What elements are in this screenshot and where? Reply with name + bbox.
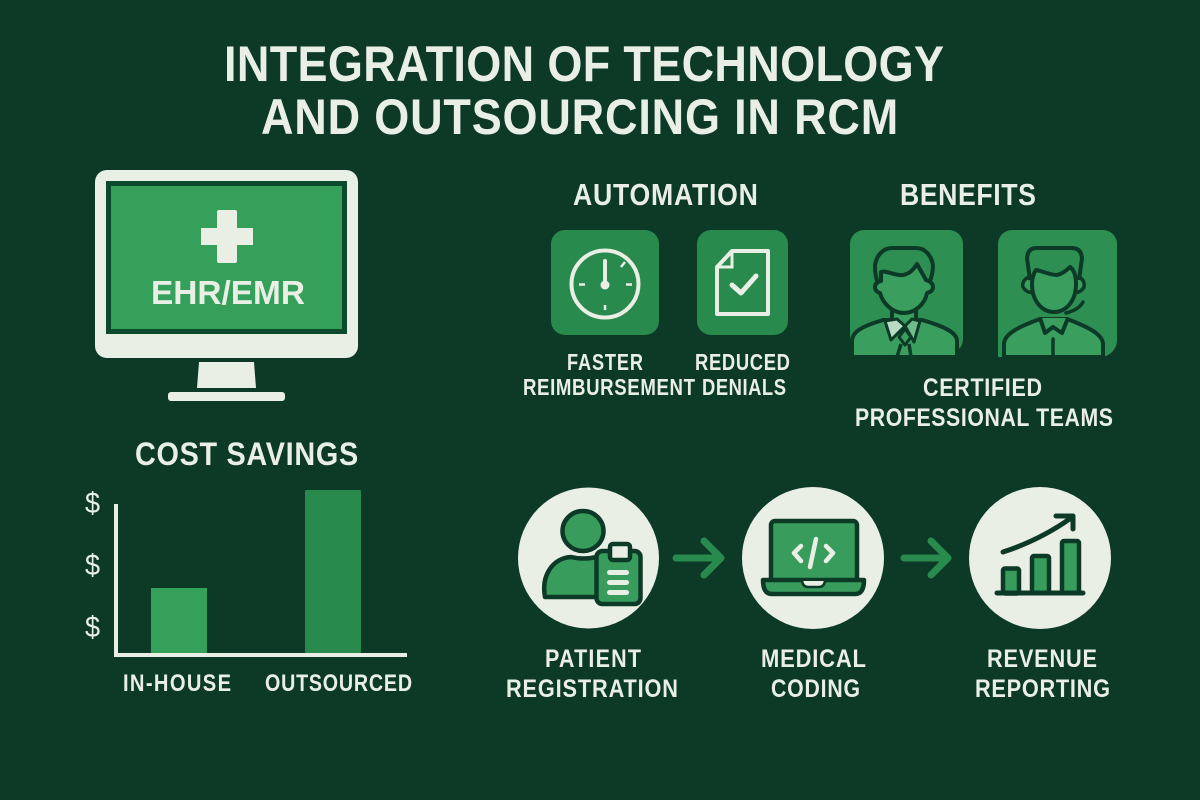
label: in-house: IN-HOUSE: [123, 669, 231, 696]
heading: automation: AUTOMATION: [573, 178, 758, 213]
icon: patient registration: [518, 488, 659, 628]
icon: professional with tie: [850, 230, 963, 357]
icon: document check card: [697, 230, 788, 335]
y axis dollar labels: $: [85, 549, 100, 582]
label: medical coding: MEDICAL: [761, 645, 866, 672]
label: revenue reporting: REPORTING: [975, 675, 1110, 702]
label: outsourced: OUTSOURCED: [265, 669, 412, 696]
title: INTEGRATION OF TECHNOLOGY: [224, 37, 944, 93]
label: revenue reporting: [975, 645, 1110, 702]
title: AND OUTSOURCING IN RCM: [261, 90, 898, 146]
icon: EHR/EMR monitor: [95, 170, 358, 401]
label: reduced denials: REDUCED: [695, 350, 790, 376]
label: faster reimbursement: [523, 350, 695, 400]
label: medical coding: CODING: [771, 674, 860, 702]
label: patient registration: REGISTRATION: [506, 675, 678, 702]
icon: EHR/EMR monitor: EHR/EMR: [151, 274, 305, 311]
bar: in-house: [151, 588, 207, 653]
label: faster reimbursement: REIMBURSEMENT: [523, 375, 695, 400]
icon: medical coding laptop: [742, 487, 884, 629]
label: certified professional teams: [855, 373, 1113, 431]
label: patient registration: PATIENT: [545, 644, 641, 672]
label: faster reimbursement: FASTER: [567, 350, 643, 376]
y axis dollar labels: [85, 487, 100, 644]
label: reduced denials: DENIALS: [702, 375, 786, 401]
chart axes: [116, 504, 407, 655]
y axis dollar labels: $: [85, 487, 100, 520]
icon: clock card: [551, 230, 659, 335]
icon: revenue reporting chart: [969, 487, 1111, 629]
label: patient registration: [506, 644, 678, 702]
label: reduced denials: [695, 350, 790, 401]
arrow: registration to coding: [676, 541, 721, 575]
icon: professional with collar: [998, 230, 1117, 357]
bar: outsourced: [305, 490, 361, 653]
label: medical coding: [761, 645, 866, 702]
panel: cost savings chart: [85, 437, 412, 696]
label: certified professional teams: CERTIFIED: [923, 373, 1042, 401]
title: [224, 37, 944, 146]
heading: benefits: BENEFITS: [900, 178, 1036, 213]
y axis dollar labels: $: [85, 611, 100, 644]
label: certified professional teams: PROFESSIONAL TEAMS: [855, 403, 1113, 431]
heading: cost savings: COST SAVINGS: [135, 437, 358, 472]
arrow: coding to reporting: [904, 541, 948, 575]
label: revenue reporting: REVENUE: [987, 645, 1097, 672]
